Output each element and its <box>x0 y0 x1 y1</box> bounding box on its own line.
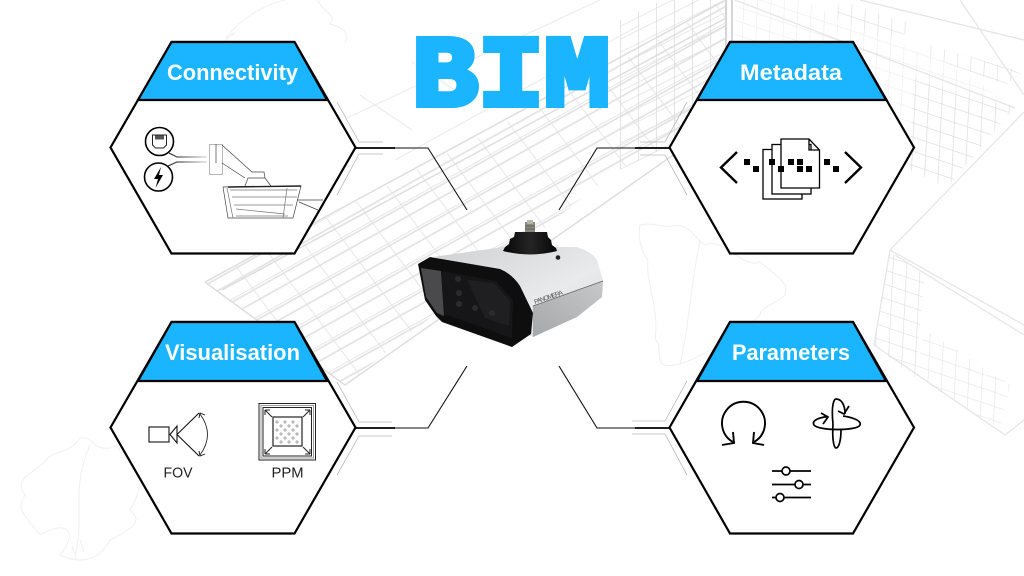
brand label: PANOMERA <box>533 289 565 306</box>
label: PPM: PPM <box>272 464 304 482</box>
heading: connectivity: Connectivity <box>167 60 299 85</box>
heading band: metadata <box>697 42 886 100</box>
panel: connectivity <box>110 42 356 254</box>
front bezel <box>418 257 533 347</box>
icon: sliders <box>772 467 811 502</box>
icon: wall mounted camera <box>210 144 323 218</box>
heading: metadata: Metadata <box>740 60 843 85</box>
icon: code chevrons and documents <box>721 139 861 199</box>
connector stud <box>525 220 535 234</box>
connector lines <box>337 102 687 475</box>
camera body <box>433 247 603 337</box>
icon: ethernet port <box>146 128 174 156</box>
heading band: parameters <box>697 322 886 381</box>
heading band: connectivity <box>138 42 327 100</box>
icon: pan rotation <box>722 402 765 445</box>
icon: power bolt <box>144 163 172 191</box>
heading: parameters: Parameters <box>732 340 850 365</box>
cable gland <box>503 232 557 254</box>
title: BIM <box>412 23 610 136</box>
background: building sketch <box>205 0 1024 435</box>
heading: visualisation: Visualisation <box>165 340 300 365</box>
camera product image <box>418 220 603 347</box>
icon: pixels per metre <box>259 404 316 460</box>
panel: visualisation <box>110 322 356 534</box>
icon: field of view <box>149 413 208 456</box>
panel: parameters <box>670 322 914 534</box>
background: tree outlines <box>21 0 786 560</box>
label: FOV: FOV <box>164 464 192 482</box>
icon: cables <box>168 153 207 166</box>
panel: metadata <box>670 42 914 254</box>
icon: axis rotation <box>813 399 860 448</box>
heading band: visualisation <box>138 322 327 381</box>
